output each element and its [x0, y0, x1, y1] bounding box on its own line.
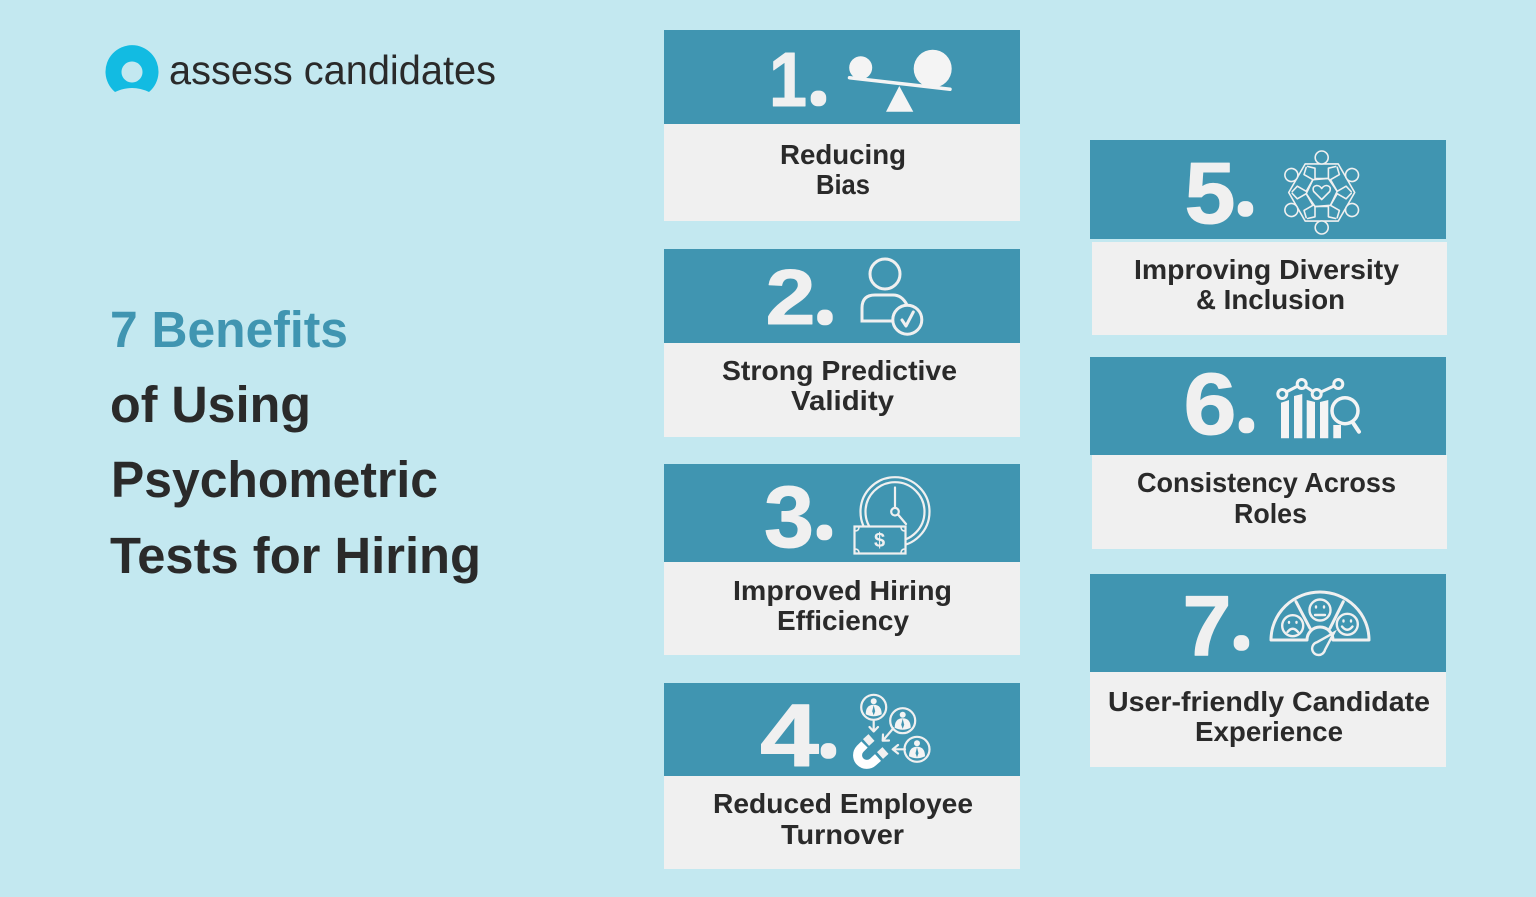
sad face: [1282, 615, 1303, 636]
number 3: 3: [764, 469, 814, 566]
number 5: 5: [1184, 145, 1236, 242]
number 7: .: [1240, 631, 1243, 647]
label: Efficiency: [777, 605, 909, 636]
title: [110, 301, 481, 584]
title line: Psychometric: Psychometric: [111, 451, 438, 508]
label: Reduced Employee: [713, 788, 973, 819]
label: [722, 355, 957, 416]
label: Improving Diversity: [1134, 254, 1399, 285]
icon: seesaw balance: [849, 50, 952, 112]
label: Bias: [816, 169, 870, 200]
number 3: .: [822, 520, 826, 536]
number 7: 7: [1182, 579, 1232, 674]
number 1: .: [816, 86, 820, 102]
happy face: [1337, 614, 1358, 635]
panel: benefit 6 Consistency Across Roles: [1090, 356, 1447, 549]
icon: bar chart with magnifier: [1278, 380, 1359, 438]
title line: of Using: of Using: [110, 376, 311, 433]
label: [713, 788, 973, 850]
label: User-friendly Candidate: [1108, 686, 1430, 717]
panel: benefit 7 User-friendly Candidate Experience: [1090, 574, 1446, 767]
logo mark: [106, 45, 158, 92]
title line: 7 Benefits: 7 Benefits: [110, 301, 348, 358]
logo wordmark: assess candidates: [169, 47, 496, 93]
label: Improved Hiring: [733, 575, 952, 606]
panel: benefit 1 Reducing Bias: [664, 30, 1020, 221]
number 5: .: [1244, 197, 1247, 213]
label: Experience: [1195, 716, 1343, 747]
label: [1134, 254, 1399, 315]
icon: magnet attracting people: [858, 695, 930, 764]
title line: Tests for Hiring: Tests for Hiring: [110, 527, 481, 584]
panel: benefit 3 Improved Hiring Efficiency: [664, 464, 1020, 655]
icon: person with check: [862, 259, 922, 334]
neutral face: [1310, 600, 1330, 620]
label: Validity: [791, 385, 894, 416]
label: [780, 139, 906, 200]
number 6: 6: [1184, 356, 1236, 453]
panel: benefit 2 Strong Predictive Validity: [664, 249, 1020, 437]
number 4: 4: [760, 685, 820, 785]
label: [1108, 686, 1430, 747]
label: Consistency Across: [1137, 467, 1396, 498]
label: Turnover: [781, 819, 904, 850]
gauge needle: [1312, 633, 1334, 655]
panel: benefit 5 Improving Diversity & Inclusion: [1090, 140, 1447, 335]
label: Strong Predictive: [722, 355, 957, 386]
label: & Inclusion: [1196, 284, 1345, 315]
icon: clock and banknote: [854, 477, 930, 554]
number 2: 2: [766, 253, 816, 341]
number 6: .: [1244, 414, 1248, 430]
label: [733, 575, 952, 636]
label: Reducing: [780, 139, 906, 170]
panel: benefit 4 Reduced Employee Turnover: [664, 683, 1020, 869]
number 1: 1: [769, 37, 807, 123]
icon: circle of people with heart: [1278, 151, 1365, 234]
number 2: .: [823, 306, 827, 322]
label: Roles: [1234, 498, 1307, 529]
dollar sign: $: [874, 530, 885, 552]
logo: assess candidates: [106, 45, 496, 93]
number 4: .: [826, 739, 830, 755]
label: [1137, 467, 1396, 529]
icon: satisfaction gauge: [1271, 592, 1369, 655]
